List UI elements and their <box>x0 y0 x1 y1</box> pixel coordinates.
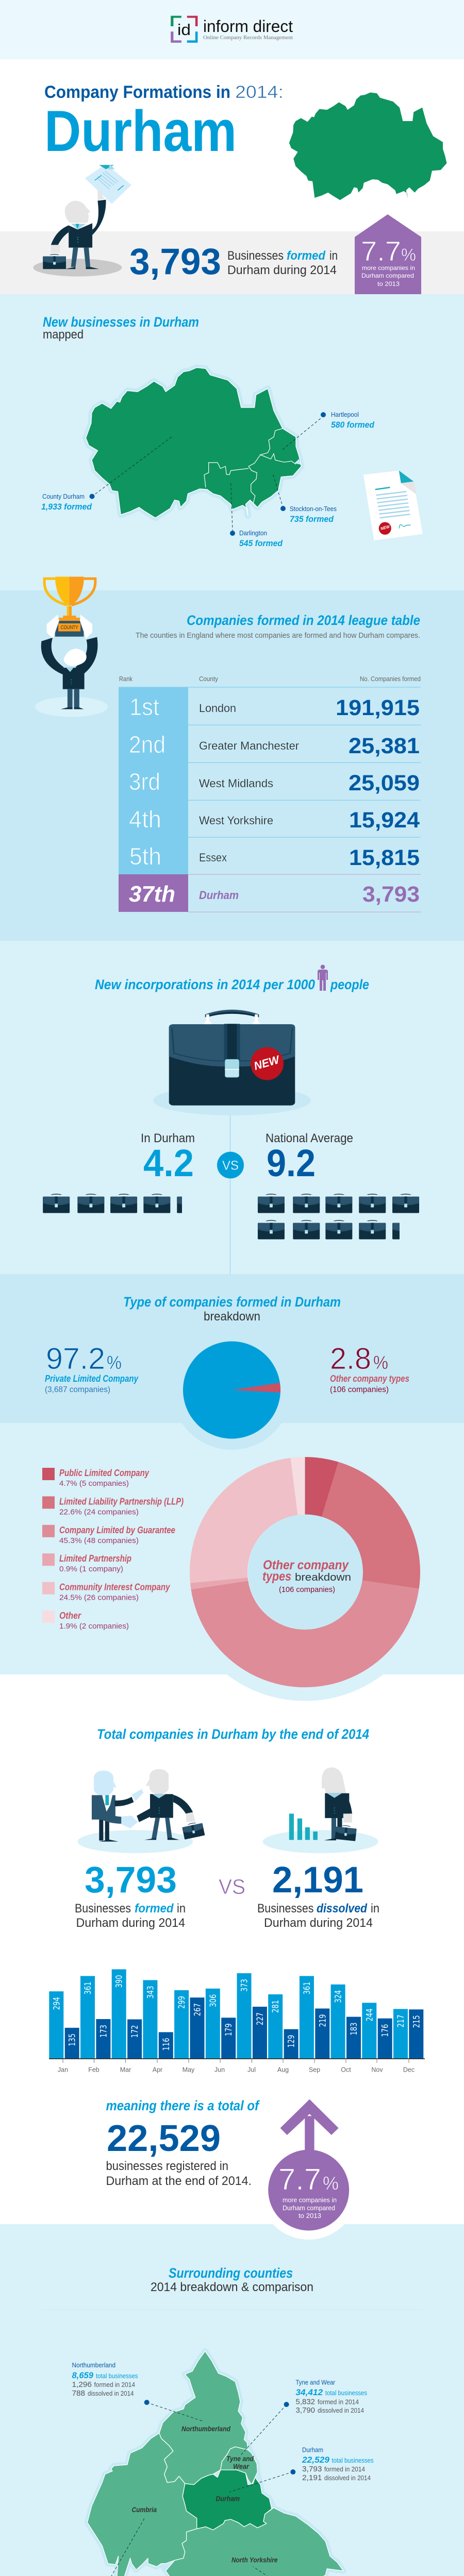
row: West Yorkshire: West Yorkshire <box>199 814 273 827</box>
stat: private limited company: (3,687 companies) <box>45 1385 110 1394</box>
callout: arrow and 7.7% growth circle: % <box>323 2173 339 2194</box>
callout: Northumberland: total businesses <box>96 2372 138 2380</box>
bar chart: monthly formed and dissolved: Oct <box>341 2066 351 2073</box>
illustration: briefcase with NEW badge <box>153 1010 311 1115</box>
stat: private limited company: 97.2 <box>46 1342 105 1376</box>
legend: other company types: Company Limited by Guarantee <box>59 1525 175 1535</box>
callout: Tyne and Wear: total businesses <box>325 2389 367 2397</box>
heading: 2014 breakdown & comparison <box>151 2280 313 2294</box>
stat: 22,529 total businesses: businesses registered in <box>106 2159 228 2173</box>
logo: inform direct <box>171 16 293 43</box>
bar chart: monthly formed and dissolved: Aug <box>277 2066 289 2073</box>
callout: arrow and 7.7% growth circle: 7.7 <box>278 2163 321 2196</box>
map label: Darlington: 545 formed <box>239 538 283 548</box>
logo: inform direct: inform direct <box>203 17 293 36</box>
illustration: two businessmen shaking hands <box>77 1769 205 1853</box>
callout: arrow and 7.7% growth circle: Durham compared <box>283 2205 335 2212</box>
bar chart: monthly formed and dissolved: 361 <box>83 1981 93 1994</box>
heading: Companies formed in 2014 league table <box>187 613 420 628</box>
row: Greater Manchester: 25,381 <box>349 734 420 758</box>
map: Durham county <box>289 93 447 200</box>
callout: Durham: 3,793 <box>302 2465 322 2473</box>
row: Essex: 5th <box>129 843 161 870</box>
row: London <box>129 693 420 720</box>
stat: 3,793 businesses formed <box>129 242 338 282</box>
comparison: formed vs dissolved: in <box>371 1902 379 1916</box>
donut chart: other company types: (106 companies) <box>279 1585 335 1594</box>
row: West Yorkshire <box>129 806 420 833</box>
bar chart: monthly formed and dissolved: 176 <box>380 2024 391 2037</box>
comparison: formed vs dissolved <box>75 1860 379 1930</box>
row: Essex <box>129 843 420 870</box>
legend: other company types: Limited Liability Partnership (LLP) <box>59 1496 184 1506</box>
logo: inform direct: Online Company Records Management <box>203 35 293 41</box>
bar chart: monthly formed and dissolved: May <box>183 2066 195 2073</box>
callout: Tyne and Wear: 34,412 <box>296 2388 323 2397</box>
illustration: businessman with falling bars <box>263 1768 378 1853</box>
map: North East counties: Cumbria <box>132 2505 157 2514</box>
legend: other company types: 45.3% (48 companies) <box>59 1536 139 1545</box>
map label: County Durham: County Durham <box>42 493 85 500</box>
bar chart: monthly formed and dissolved: 172 <box>130 2025 140 2038</box>
row: Greater Manchester: 2nd <box>129 731 165 758</box>
callout: Tyne and Wear: 3,790 <box>296 2406 315 2415</box>
bar chart: monthly formed and dissolved: 267 <box>193 2003 203 2016</box>
pictogram: 9.2 briefcases <box>258 1194 419 1239</box>
bar chart: monthly formed and dissolved: Jul <box>247 2066 256 2073</box>
stat: private limited company: % <box>107 1352 122 1373</box>
callout: Tyne and Wear <box>284 2378 367 2415</box>
row: London: 1st <box>129 693 159 720</box>
comparison: Durham 4.2 vs national 9.2: National Average <box>266 1131 353 1145</box>
bar chart: monthly formed and dissolved: Apr <box>153 2066 162 2073</box>
pictogram: 4.2 briefcases <box>43 1193 182 1213</box>
row: Essex: Essex <box>199 851 227 864</box>
legend: other company types: 22.6% (24 companies) <box>59 1507 139 1516</box>
callout: 7.7% more companies: Durham compared <box>361 272 414 279</box>
stat: other company types <box>330 1342 409 1394</box>
comparison: formed vs dissolved: Businesses <box>257 1902 313 1916</box>
bar chart: monthly formed and dissolved: 129 <box>287 2035 297 2048</box>
illustration: man holding county trophy <box>35 577 108 717</box>
comparison: Durham 4.2 vs national 9.2: 9.2 <box>267 1142 316 1184</box>
stat: 3,793 businesses formed: in <box>329 249 338 263</box>
callout: Durham: dissolved in 2014 <box>324 2475 371 2482</box>
row: West Midlands: 25,059 <box>349 771 420 795</box>
bar chart: monthly formed and dissolved: 173 <box>98 2025 109 2038</box>
comparison: Durham 4.2 vs national 9.2: 4.2 <box>143 1142 194 1184</box>
bar chart: monthly formed and dissolved: 324 <box>334 1990 344 2003</box>
bar chart: monthly formed and dissolved: Jan <box>58 2066 68 2073</box>
comparison: Durham 4.2 vs national 9.2 <box>141 1131 353 1184</box>
comparison: formed vs dissolved: dissolved <box>317 1902 368 1916</box>
row: West Midlands <box>129 768 420 795</box>
legend: other company types: Other <box>59 1611 81 1621</box>
comparison: formed vs dissolved: formed <box>135 1902 174 1916</box>
map: North East counties: Northumberland <box>181 2425 230 2433</box>
heading: breakdown <box>204 1310 260 1324</box>
heading <box>123 1294 341 1324</box>
illustration: businessman holding document <box>33 164 131 277</box>
callout: Northumberland: dissolved in 2014 <box>88 2390 134 2397</box>
callout: Northumberland: Northumberland <box>72 2361 115 2369</box>
callout: Tyne and Wear: 5,832 <box>296 2398 315 2406</box>
callout: Tyne and Wear: formed in 2014 <box>318 2399 359 2406</box>
table: companies formed in 2014: No. Companies formed <box>360 675 421 683</box>
title: Durham <box>44 99 237 163</box>
heading: people <box>330 977 369 992</box>
callout: Tyne and Wear: dissolved in 2014 <box>318 2407 364 2414</box>
comparison: Durham 4.2 vs national 9.2: In Durham <box>141 1131 195 1145</box>
heading: Total companies in Durham by the end of 2014 <box>97 1726 369 1742</box>
illustration: briefcase with NEW badge: NEW <box>252 1053 282 1073</box>
row: Durham <box>129 882 420 907</box>
stat: 3,793 businesses formed: Durham during 2014 <box>227 263 337 277</box>
callout: Northumberland: 8,659 <box>72 2371 94 2380</box>
comparison: formed vs dissolved: Durham during 2014 <box>76 1916 185 1930</box>
map label: County Durham <box>41 493 95 512</box>
callout: Durham: Durham <box>302 2446 323 2453</box>
bar chart: monthly formed and dissolved: Sep <box>309 2066 320 2073</box>
title: Company Formations in <box>44 82 230 102</box>
callout: Tyne and Wear: Tyne and Wear <box>296 2378 336 2386</box>
legend: other company types: Limited Partnership <box>59 1553 131 1564</box>
callout: 7.7% more companies: % <box>401 245 416 265</box>
stat: other company types: Other company types <box>330 1374 409 1384</box>
panel: surrounding counties <box>0 2224 464 2576</box>
bar chart: monthly formed and dissolved: 135 <box>68 2033 78 2046</box>
legend: other company types: 1.9% (2 companies) <box>59 1622 129 1631</box>
legend: other company types: Public Limited Company <box>59 1468 150 1478</box>
bar chart: monthly formed and dissolved: 343 <box>145 1986 156 1998</box>
callout: arrow and 7.7% growth circle: to 2013 <box>299 2212 321 2219</box>
row: Durham: 3,793 <box>362 882 420 907</box>
map label: Darlington <box>230 529 283 548</box>
row: Greater Manchester <box>129 731 420 758</box>
stat: 22,529 total businesses <box>106 2098 260 2188</box>
bar chart: monthly formed and dissolved: 306 <box>208 1994 219 2007</box>
bar chart: monthly formed and dissolved: 227 <box>255 2012 266 2025</box>
panel: companies formed league table <box>0 577 464 941</box>
bar chart: monthly formed and dissolved: Feb <box>88 2066 100 2073</box>
callout: Durham: 2,191 <box>302 2474 322 2482</box>
map: North East counties: North Yorkshire <box>231 2556 278 2564</box>
panel: total companies by end of 2014 <box>0 1674 464 2240</box>
callout: Durham: 22,529 <box>302 2455 330 2465</box>
row: Durham: Durham <box>199 889 239 902</box>
table: companies formed in 2014 <box>119 675 421 912</box>
donut chart: other company types: types <box>262 1569 291 1584</box>
legend: other company types: 4.7% (5 companies) <box>59 1479 129 1488</box>
icon: new company document: NEW <box>380 524 391 531</box>
legend: other company types: 0.9% (1 company) <box>59 1565 123 1573</box>
bar chart: monthly formed and dissolved: 244 <box>364 2008 375 2021</box>
stat: other company types: 2.8 <box>330 1342 371 1376</box>
heading: Type of companies formed in Durham <box>123 1294 341 1310</box>
row: West Yorkshire: 4th <box>129 806 161 833</box>
subheading: The counties in England where most companies are formed and how Durham compares. <box>136 631 420 640</box>
map label: Stockton-on-Tees <box>280 505 337 524</box>
bar chart: monthly formed and dissolved: 116 <box>161 2038 172 2050</box>
callout: 7.7% more companies: 7.7 <box>361 236 401 267</box>
callout: Northumberland <box>72 2361 150 2405</box>
heading: New incorporations in 2014 per 1000 <box>95 977 315 992</box>
legend: other company types: 24.5% (26 companies) <box>59 1594 139 1602</box>
stat: 3,793 businesses formed: Businesses <box>227 249 284 263</box>
pie chart: 97.2% vs 2.8% <box>172 1330 292 1450</box>
donut chart: other company types: breakdown <box>295 1572 351 1583</box>
callout: 7.7% more companies: to 2013 <box>377 280 400 287</box>
callout: Durham: total businesses <box>332 2456 374 2464</box>
map: North East counties: Wear <box>233 2462 250 2470</box>
donut chart: other company types: Other company <box>263 1558 349 1572</box>
legend: other company types <box>42 1468 184 1631</box>
bar chart: monthly formed and dissolved <box>49 1969 425 2073</box>
stat: 22,529 total businesses: Durham at the end of 2014. <box>106 2174 252 2188</box>
row: London: 191,915 <box>336 696 420 720</box>
map label: Hartlepool: 580 formed <box>331 420 375 430</box>
bar chart: monthly formed and dissolved: 294 <box>52 1997 62 2010</box>
bar chart: monthly formed and dissolved: 179 <box>224 2023 234 2036</box>
panel: header logo band <box>0 0 464 59</box>
bar chart: monthly formed and dissolved: Dec <box>403 2066 415 2073</box>
row: London: London <box>199 702 236 715</box>
map: North East counties <box>87 2351 343 2576</box>
comparison: formed vs dissolved: Durham during 2014 <box>264 1916 373 1930</box>
comparison: Durham 4.2 vs national 9.2: VS <box>222 1158 239 1173</box>
legend: other company types: Community Interest Company <box>59 1582 170 1592</box>
row: West Yorkshire: 15,924 <box>349 808 420 833</box>
bar chart: monthly formed and dissolved: 219 <box>318 2014 328 2027</box>
row: Durham: 37th <box>129 882 175 907</box>
icon: new company document <box>363 470 423 540</box>
callout: arrow and 7.7% growth circle <box>259 2099 358 2240</box>
table: companies formed in 2014: Rank <box>119 675 132 683</box>
map label: County Durham: 1,933 formed <box>41 502 92 512</box>
table: companies formed in 2014: County <box>199 675 218 683</box>
donut chart: other company types <box>176 1444 434 1701</box>
callout: 7.7% more companies <box>355 214 421 294</box>
bar chart: monthly formed and dissolved: 183 <box>349 2023 359 2036</box>
stat: 22,529 total businesses: 22,529 <box>107 2118 221 2159</box>
heading: mapped <box>43 328 84 342</box>
map label: Stockton-on-Tees: Stockton-on-Tees <box>290 505 337 513</box>
bar chart: monthly formed and dissolved: 215 <box>411 2015 422 2028</box>
heading <box>95 964 369 992</box>
map: Durham districts <box>86 367 321 532</box>
bar chart: monthly formed and dissolved: 217 <box>396 2014 406 2027</box>
panel: new incorporations per 1000 people <box>43 964 420 1274</box>
bar chart: monthly formed and dissolved: Nov <box>371 2066 383 2073</box>
map label: Hartlepool <box>321 411 375 430</box>
heading: New businesses in Durham <box>43 314 199 330</box>
stat: other company types: (106 companies) <box>330 1385 389 1394</box>
callout: Durham <box>290 2446 374 2482</box>
map: North East counties: Durham <box>216 2495 240 2503</box>
heading: Surrounding counties <box>169 2265 293 2281</box>
callout: arrow and 7.7% growth circle: more companies in <box>283 2197 337 2204</box>
comparison: formed vs dissolved: 2,191 <box>272 1860 363 1901</box>
bar chart: monthly formed and dissolved: 373 <box>239 1979 250 1992</box>
bar chart: monthly formed and dissolved: Jun <box>214 2066 225 2073</box>
callout: Northumberland: formed in 2014 <box>94 2381 135 2388</box>
heading <box>151 2265 313 2294</box>
stat: 3,793 businesses formed: formed <box>287 249 326 263</box>
row: Essex: 15,815 <box>349 845 420 870</box>
panel: new businesses mapped <box>0 294 464 590</box>
map label: Hartlepool: Hartlepool <box>331 411 359 418</box>
stat: private limited company: Private Limited Company <box>45 1374 139 1384</box>
row: West Midlands: West Midlands <box>199 777 273 790</box>
illustration: man holding county trophy: COUNTY <box>61 625 78 631</box>
bar chart: monthly formed and dissolved: Mar <box>120 2066 131 2073</box>
stat: private limited company <box>45 1342 139 1394</box>
map: North East counties: Tyne and <box>226 2454 254 2463</box>
panel: type of companies breakdown <box>0 1274 464 1701</box>
map label: Stockton-on-Tees: 735 formed <box>290 514 334 524</box>
row: West Midlands: 3rd <box>129 768 160 795</box>
comparison: formed vs dissolved: VS <box>219 1875 245 1899</box>
heading <box>43 314 199 342</box>
bar chart: monthly formed and dissolved: 299 <box>177 1996 187 2009</box>
row: Greater Manchester: Greater Manchester <box>199 739 299 752</box>
bar chart: monthly formed and dissolved: 390 <box>114 1975 125 1988</box>
callout: Northumberland: 1,296 <box>72 2381 92 2389</box>
stat: 3,793 businesses formed: 3,793 <box>129 242 221 282</box>
callout: Durham: formed in 2014 <box>324 2466 365 2473</box>
callout: Northumberland: 788 <box>72 2389 85 2398</box>
callout: 7.7% more companies: more companies in <box>362 264 415 272</box>
panel: hero <box>0 59 464 294</box>
comparison: formed vs dissolved: 3,793 <box>85 1860 177 1901</box>
bar chart: monthly formed and dissolved: 361 <box>302 1981 312 1994</box>
bar chart: monthly formed and dissolved: 281 <box>271 2000 281 2013</box>
logo: inform direct: id <box>177 21 191 39</box>
stat: other company types: % <box>373 1352 388 1373</box>
title: 2014: <box>235 82 284 102</box>
map label: Darlington: Darlington <box>239 529 267 537</box>
comparison: formed vs dissolved: in <box>177 1902 186 1916</box>
stat: 22,529 total businesses: meaning there is a total of <box>106 2098 260 2113</box>
comparison: formed vs dissolved: Businesses <box>75 1902 131 1916</box>
